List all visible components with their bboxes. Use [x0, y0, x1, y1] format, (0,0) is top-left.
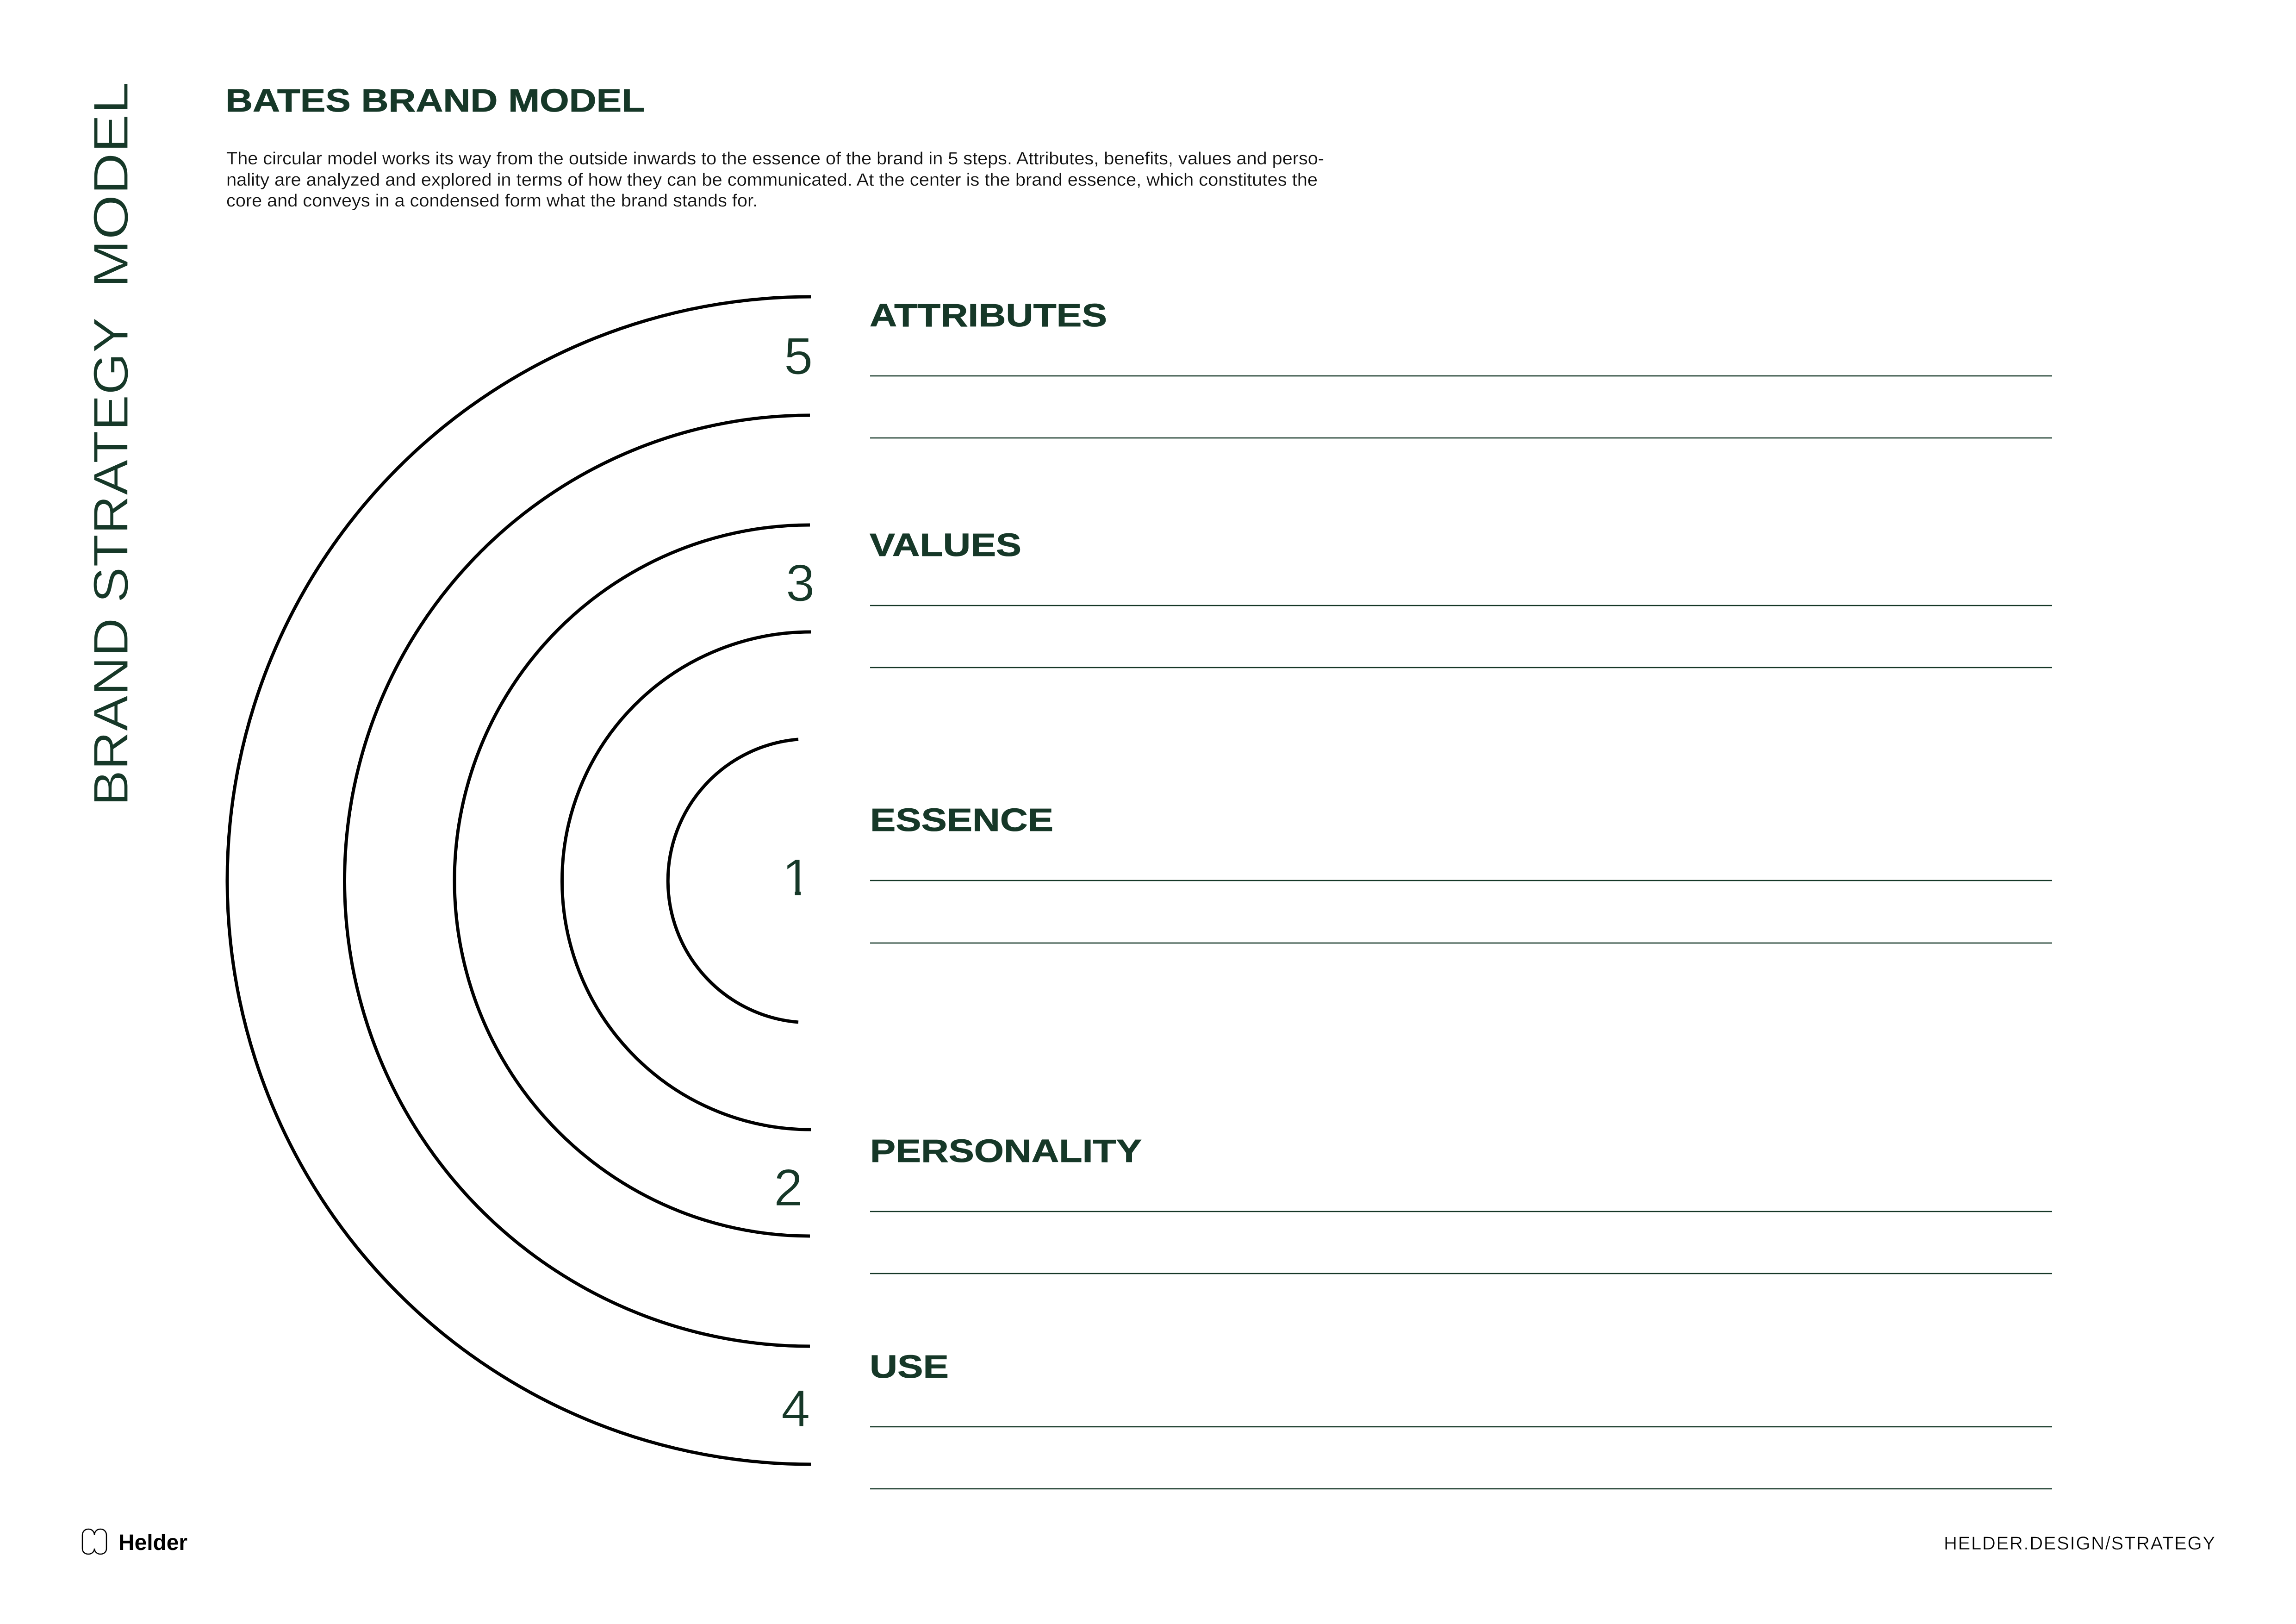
number 3: 3	[786, 554, 815, 612]
vertical page title: MODEL	[84, 82, 138, 288]
concentric half-circle diagram	[227, 297, 811, 1464]
heading: values: VALUES	[870, 527, 1021, 563]
arc 1 inner	[668, 739, 798, 1022]
intro text block: nality are analyzed and explored in terms of how they can be communicated. At the center is the brand essence, which constitutes the	[226, 170, 1318, 190]
icon: helder logo	[82, 1529, 106, 1554]
heading: essence: ESSENCE	[870, 802, 1053, 838]
number 4: 4	[781, 1380, 810, 1437]
arc 5 outer	[227, 297, 811, 1464]
intro text block: core and conveys in a condensed form what the brand stands for.	[226, 191, 758, 211]
number 2: 2	[774, 1159, 803, 1217]
brand name: Helder	[118, 1530, 187, 1555]
vertical page title	[84, 82, 138, 806]
intro text block: The circular model works its way from the outside inwards to the essence of the brand in 5 steps. Attributes, benefits, values and perso-	[226, 149, 1324, 169]
arc 2	[562, 632, 811, 1130]
vertical page title: BRAND STRATEGY	[84, 317, 138, 806]
number 1: 1	[782, 849, 811, 906]
arc 3	[454, 525, 810, 1236]
heading: use: USE	[870, 1349, 949, 1385]
title: BATES BRAND MODEL	[225, 82, 645, 119]
heading: personality: PERSONALITY	[870, 1133, 1142, 1169]
intro text block	[226, 149, 1324, 211]
footer url: HELDER.DESIGN/STRATEGY	[1944, 1533, 2215, 1554]
arc 4	[344, 415, 810, 1346]
number 5: 5	[784, 327, 813, 385]
heading: attributes: ATTRIBUTES	[870, 297, 1107, 333]
